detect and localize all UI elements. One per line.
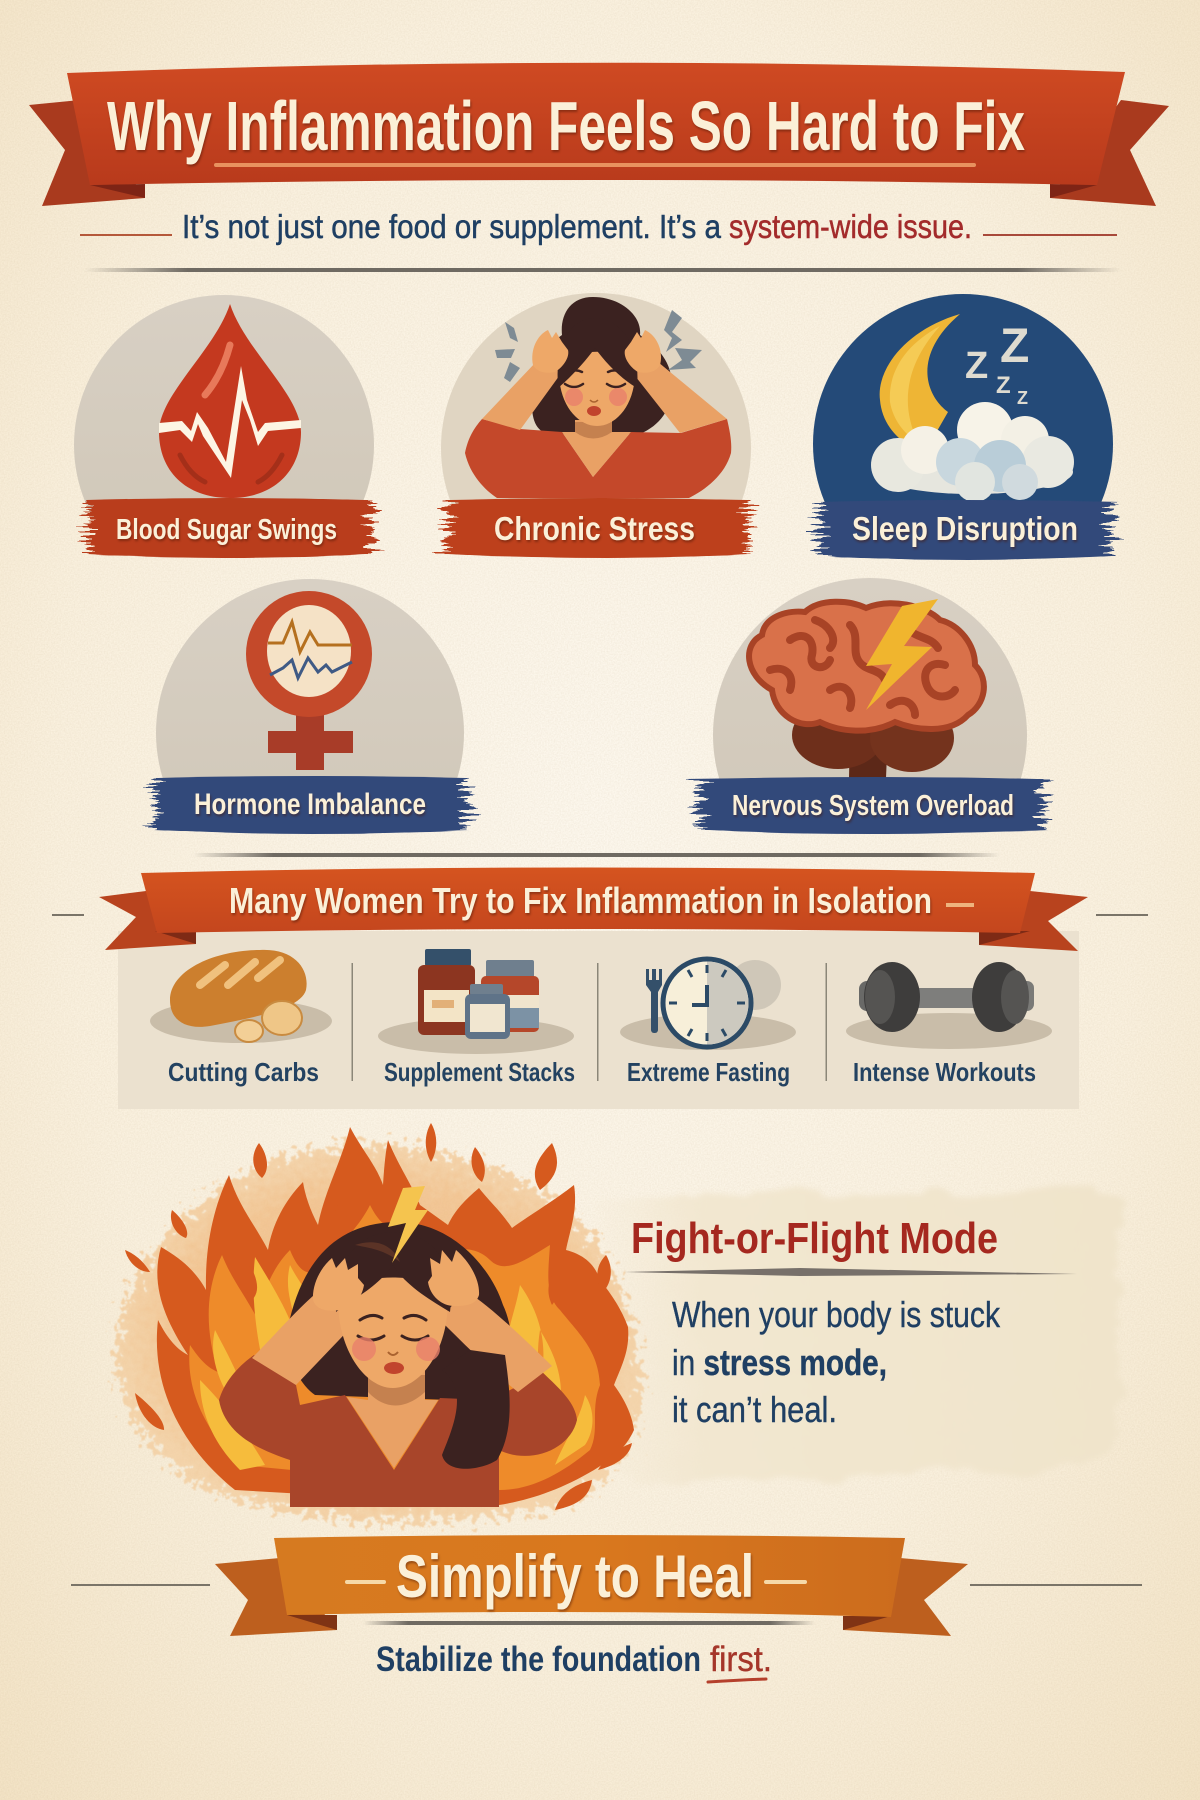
woman — [219, 1222, 577, 1507]
card: sleep disruption — [813, 294, 1113, 594]
label: Hormone Imbalance — [194, 788, 426, 821]
icon: sleeping Z letters — [965, 320, 1029, 408]
closing tagline: first. — [710, 1640, 772, 1679]
icon: brain with lightning — [749, 599, 984, 778]
icon: sleeping Z letters: Z — [965, 345, 988, 387]
item: supplement stacks: Supplement Stacks — [384, 1057, 575, 1087]
heading: Fight-or-Flight Mode — [631, 1214, 998, 1263]
icon: female symbol with waves — [246, 591, 372, 770]
panel: fight-or-flight text backdrop — [600, 1190, 1118, 1482]
item: cutting carbs — [150, 950, 332, 1087]
icon: sleeping Z letters: Z — [996, 372, 1011, 399]
panel: isolation attempts — [118, 931, 1079, 1109]
closing banner — [215, 1535, 968, 1636]
item: intense workouts — [846, 962, 1052, 1087]
long hair over shoulder — [442, 1350, 510, 1469]
text: fight-or-flight — [624, 1214, 1077, 1430]
item: supplement stacks — [378, 949, 575, 1087]
item: extreme fasting: Extreme Fasting — [627, 1057, 790, 1087]
icon: sleeping Z letters: Z — [1017, 388, 1028, 408]
side rules: closing banner — [71, 1584, 1142, 1586]
illustration: woman in flames — [116, 1123, 641, 1522]
subtitle: It’s not just one food or supplement. It’s a — [182, 208, 722, 245]
icon: moon — [880, 314, 960, 452]
ribbon — [820, 500, 1110, 560]
hands — [313, 1258, 364, 1311]
body copy: in stress mode, — [672, 1342, 887, 1383]
card: hormone imbalance — [142, 579, 481, 834]
icon: sleeping Z letters: Z — [1000, 320, 1029, 373]
flames — [157, 1127, 634, 1505]
subtitle — [80, 208, 1117, 245]
body copy: When your body is stuck — [672, 1294, 1001, 1335]
ribbon — [155, 776, 468, 834]
card: blood sugar swings — [74, 295, 374, 595]
label: Chronic Stress — [494, 510, 695, 547]
paint splash — [116, 1145, 641, 1522]
icon: blood drop with pulse — [159, 304, 301, 498]
embers — [125, 1123, 632, 1510]
header banner — [29, 63, 1169, 206]
label: Blood Sugar Swings — [116, 514, 337, 546]
heading: Simplify to Heal — [396, 1543, 754, 1610]
subtitle: system-wide issue. — [729, 208, 972, 245]
side rules: isolation banner — [52, 914, 1148, 916]
item: cutting carbs: Cutting Carbs — [168, 1057, 319, 1087]
isolation banner — [99, 868, 1088, 951]
closing tagline: Stabilize the foundation — [376, 1640, 701, 1679]
item: extreme fasting — [620, 959, 796, 1087]
icon: cloud — [871, 402, 1074, 502]
ribbon — [88, 498, 372, 558]
body copy — [672, 1294, 1001, 1430]
body copy: it can’t heal. — [672, 1389, 837, 1430]
ribbon — [446, 498, 748, 558]
card: nervous system overload — [686, 578, 1054, 834]
label: Sleep Disruption — [852, 510, 1078, 547]
ribbon — [700, 777, 1042, 834]
lightning bolt — [388, 1186, 428, 1263]
card: chronic stress — [441, 293, 751, 603]
heading: Many Women Try to Fix Inflammation in Isolation — [229, 880, 932, 921]
icon: stressed woman — [465, 297, 731, 498]
item: intense workouts: Intense Workouts — [853, 1057, 1036, 1087]
label: Nervous System Overload — [732, 790, 1014, 822]
